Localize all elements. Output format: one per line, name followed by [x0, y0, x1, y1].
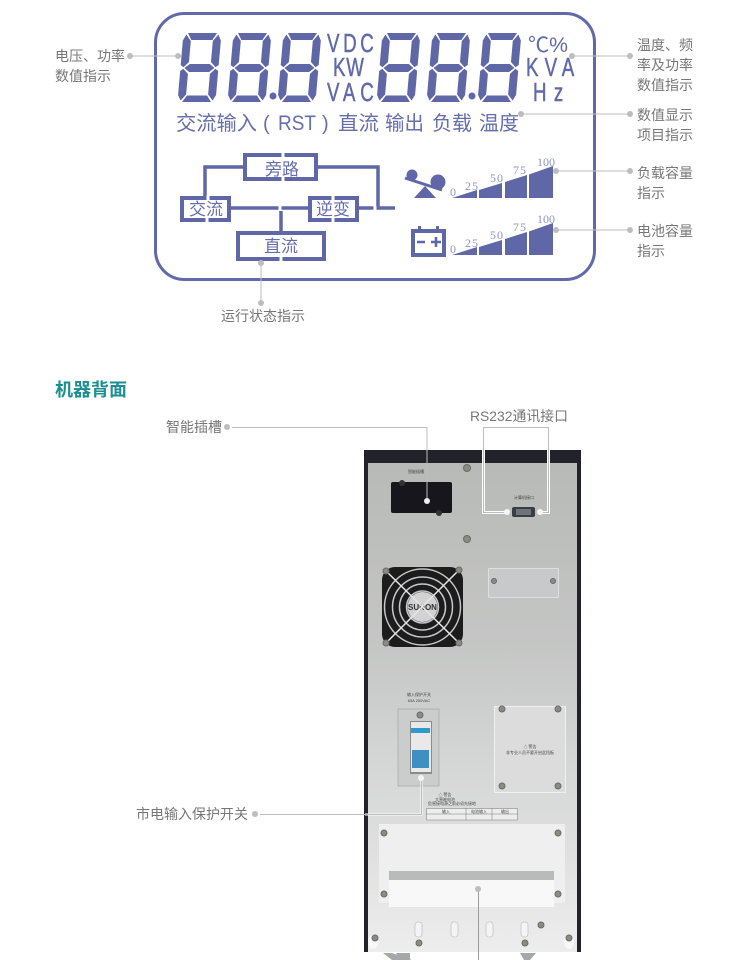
unit labels: VDC [327, 28, 374, 58]
battery capacity bars: 0 [450, 242, 456, 256]
callout: operating status indicator: 运行状态指示 [221, 308, 305, 324]
fan: SUNON [408, 603, 437, 612]
icon: battery [413, 226, 444, 255]
load capacity bars: 100 [537, 155, 555, 169]
display item labels: 输出 [385, 112, 424, 135]
callout: smart slot [166, 419, 430, 504]
right seven-segment readout [376, 33, 522, 102]
callout: mains input protection switch [136, 775, 424, 822]
callout: display item indicator: 项目指示 [637, 127, 693, 143]
callout: smart slot: 智能插槽 [166, 419, 222, 435]
display item labels: 负载 [432, 112, 472, 135]
terminal table: △ 警告 [438, 791, 452, 797]
callout: operating status indicator [221, 260, 305, 324]
operating status diagram: 逆变 [316, 200, 350, 219]
plate screws [464, 464, 470, 542]
warning plate [494, 706, 566, 792]
smart slot: 智能插槽 [408, 468, 424, 474]
callout: voltage and power value: 数值指示 [55, 68, 111, 84]
RS232 connector: 计算机接口 [514, 494, 534, 500]
display item labels [176, 112, 519, 135]
load capacity bars: 75 [513, 163, 527, 177]
terminal table [426, 791, 518, 820]
callout: display item indicator [518, 107, 693, 143]
callout: temperature, frequency and power value: 率及功率 [637, 57, 693, 73]
callout line: terminal cover [475, 886, 481, 960]
unit labels [327, 28, 575, 107]
battery capacity bars: 100 [537, 212, 555, 226]
operating status diagram: 旁路 [265, 160, 299, 179]
callout: RS232 port [470, 408, 568, 515]
callout: RS232 port: RS232通讯接口 [470, 408, 568, 424]
load capacity bars: 0 [450, 185, 456, 199]
base and feet [368, 922, 574, 960]
callout: voltage and power value [55, 48, 181, 84]
unit labels: KVA [526, 52, 575, 82]
fan [382, 567, 463, 647]
callout: battery capacity indicator: 电池容量 [637, 223, 693, 239]
display item labels: ) [322, 113, 329, 135]
load capacity bars: 50 [490, 171, 504, 185]
load capacity bars: 25 [465, 179, 479, 193]
terminal table: 输入 [442, 808, 450, 814]
cover plate [488, 568, 558, 598]
battery capacity bars: 25 [465, 236, 479, 250]
callout: load capacity indicator: 负载容量 [637, 165, 693, 181]
rear plate [368, 463, 577, 952]
panel: LCD display [156, 14, 594, 280]
unit labels: ℃% [528, 34, 568, 57]
display item labels: RST [278, 112, 316, 135]
callout: temperature, frequency and power value: 数值指示 [637, 77, 693, 93]
callout: mains input protection switch: 市电输入保护开关 [136, 806, 248, 822]
battery capacity bars [450, 212, 555, 256]
display item labels: ( [263, 113, 270, 135]
display item labels: 直流 [338, 112, 379, 135]
callout: temperature, frequency and power value [569, 37, 693, 93]
load capacity bars [450, 155, 555, 199]
cabinet frame [364, 450, 581, 952]
terminal table: 大害被电池 [435, 796, 455, 802]
lower terminal cover [379, 824, 565, 907]
battery capacity bars: 50 [490, 228, 504, 242]
callout: voltage and power value: 电压、功率 [55, 48, 125, 64]
left seven-segment readout [177, 33, 322, 102]
RS232 connector [512, 494, 535, 517]
callout: battery capacity indicator [553, 223, 693, 259]
terminal table: 输出 [501, 808, 509, 814]
callout: load capacity indicator: 指示 [637, 185, 665, 201]
terminal table: 危害接电源之前必须先接地 [428, 800, 476, 806]
smart slot [391, 468, 452, 516]
display item labels: 温度 [479, 112, 519, 135]
warning plate: △ 警告 [523, 743, 537, 749]
operating status diagram: 交流 [189, 200, 223, 219]
circuit breaker: 输入保护开关 [407, 691, 431, 697]
warning plate: 非专业人员不要开启此挡板 [506, 749, 554, 755]
operating status diagram [182, 152, 395, 262]
callout: display item indicator: 数值显示 [637, 107, 693, 123]
callout: load capacity indicator [553, 165, 693, 201]
callout: battery capacity indicator: 指示 [637, 243, 665, 259]
operating status diagram: 直流 [264, 237, 298, 256]
circuit breaker [398, 691, 439, 786]
unit labels: Hz [533, 77, 563, 107]
heading: machine back: 机器背面 [55, 380, 127, 400]
terminal table: 电池输入 [471, 808, 487, 814]
callout: temperature, frequency and power value: 温度、频 [637, 37, 693, 53]
photo: UPS cabinet rear [364, 450, 581, 960]
unit labels: VAC [327, 77, 374, 107]
circuit breaker: 63A 250VAC [408, 698, 430, 703]
battery capacity bars: 75 [513, 220, 527, 234]
display item labels: 交流输入 [176, 112, 257, 135]
icon: load balance [405, 170, 446, 198]
unit labels: KW [333, 52, 364, 82]
